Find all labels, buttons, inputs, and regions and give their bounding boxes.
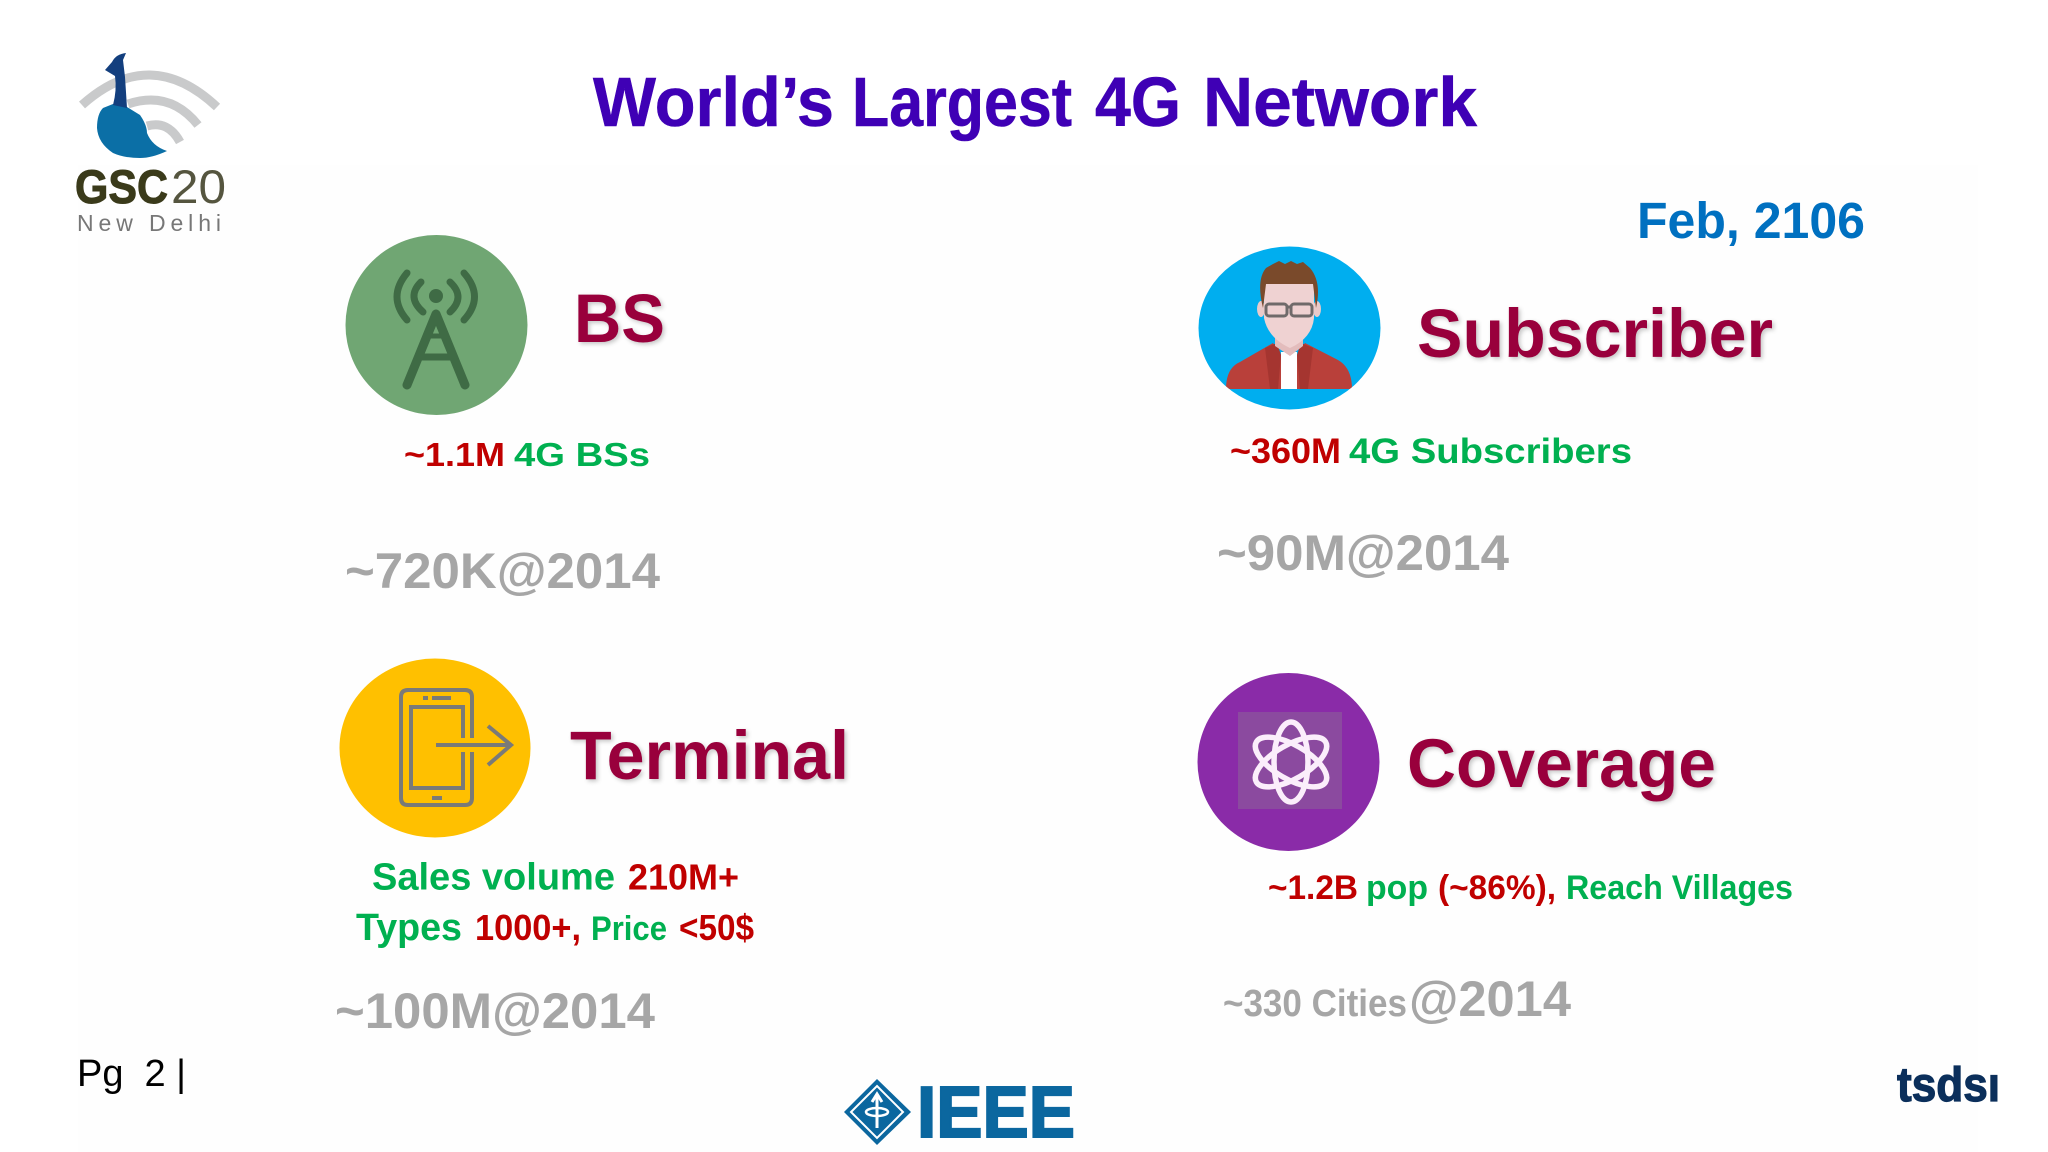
stat: population coverage: (~86%), [1438,869,1556,907]
stat: types and price: <50$ [679,907,754,948]
stat: types and price: Price [591,910,667,948]
stat: 360M subscribers: ~360M [1230,432,1341,471]
title: World’s [593,63,834,141]
logo wordmark GSC: GSC [75,160,168,213]
stat: population coverage: Reach Villages [1566,869,1793,907]
logo location: New Delhi [77,210,221,236]
stat: 2014 cities [1223,971,1571,1027]
page number: Pg 2 | [77,1053,186,1095]
panel: Subscriber [1198,246,1773,581]
icon: wifi arcs [82,75,217,142]
stat: 360M subscribers [1230,432,1632,471]
icon: atom [1198,673,1380,851]
title: Network [1203,63,1477,141]
stat: 2014 base stations: ~720K@2014 [345,543,660,599]
stat: sales volume: 210M+ [628,856,739,898]
stat: 2014 cities: ~330 Cities [1223,983,1407,1025]
heading: Coverage: Coverage [1407,725,1716,802]
wordmark: IEEE: IEEE [917,1073,1075,1152]
stat: types and price: 1000+, [475,907,581,948]
heading: Subscriber: Subscriber [1417,295,1773,372]
logo: tsdsi: tsdsı [1897,1059,2000,1112]
stat: types and price [356,907,754,949]
logo wordmark 20: 20 [171,160,226,213]
title: 4G [1095,63,1181,141]
title [593,63,1477,141]
icon: peacock [97,53,167,158]
logo: GSC20 New Delhi [75,53,226,236]
stat: 1.1M 4G BSs [404,436,650,473]
panel: Coverage [1198,673,1793,1027]
stat: population coverage: ~1.2B [1268,869,1358,907]
heading: Terminal: Terminal [570,717,849,794]
panel: Terminal [335,658,849,1039]
stat: types and price: Types [356,907,462,949]
stat: 1.1M 4G BSs: 4G BSs [514,436,650,473]
title: Largest [852,63,1072,141]
stat: 360M subscribers: 4G Subscribers [1349,432,1632,471]
stat: population coverage: pop [1366,869,1428,907]
heading: BS: BS [574,280,665,357]
stat: 1.1M 4G BSs: ~1.1M [404,436,505,473]
stat: population coverage [1268,869,1793,907]
icon: smartphone with arrow [340,658,530,838]
stat: 2014 subscribers: ~90M@2014 [1217,525,1509,581]
panel: BS [345,235,665,599]
icon: person avatar [1198,246,1380,410]
icon: cell tower [346,235,528,415]
icon: IEEE diamond [844,1079,911,1145]
logo: IEEE [844,1073,1075,1152]
date: Feb, 2106 [1637,192,1865,249]
stat: 2014 cities: @2014 [1409,971,1571,1027]
stat: 2014 terminals: ~100M@2014 [335,983,655,1039]
stat: sales volume [372,856,739,898]
stat: sales volume: Sales volume [372,856,615,898]
